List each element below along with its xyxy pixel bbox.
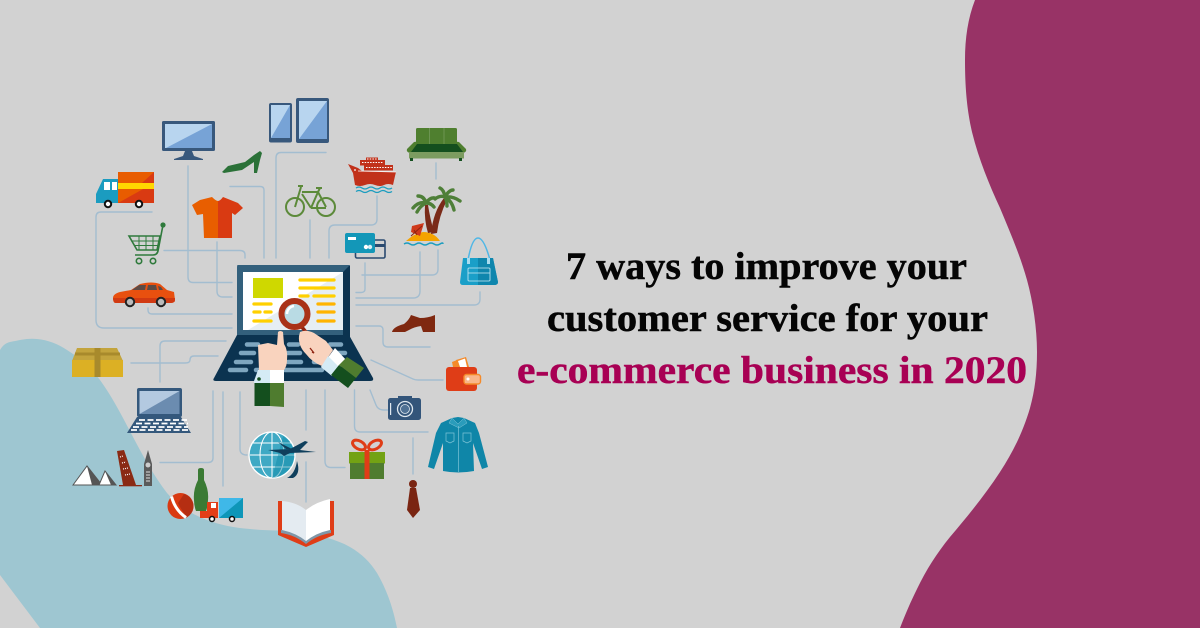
icon: cruise ship: [348, 158, 396, 192]
icon: red car: [113, 282, 175, 306]
icon: cardboard box: [72, 348, 123, 377]
central laptop with magnifier and hands: [213, 265, 373, 407]
blob: light blue left: [0, 339, 397, 628]
icon: blue shirt: [428, 417, 488, 472]
blob: purple right: [900, 0, 1200, 628]
left hand pointing: [254, 331, 287, 407]
icon: toys: [168, 468, 243, 522]
laptop keyboard base: [213, 335, 373, 381]
title: [517, 245, 1027, 392]
icon: gift box: [349, 438, 385, 479]
title line 2: customer service for your: [547, 297, 988, 340]
laptop screen: [237, 265, 350, 337]
icon: high heel shoe: [222, 151, 262, 173]
title line 1: 7 ways to improve your: [566, 245, 967, 288]
screen content: [253, 278, 334, 321]
icon: necktie: [407, 480, 420, 518]
icon: credit cards: [345, 233, 385, 258]
icon: orange t-shirt: [192, 197, 243, 238]
icon: shopping cart: [129, 223, 165, 264]
connector lines: [96, 152, 480, 502]
icon: blue handbag: [460, 238, 498, 285]
icon: delivery truck: [96, 172, 154, 207]
icon: bicycle: [286, 186, 335, 216]
icon: desktop monitor: [162, 121, 215, 160]
right hand holding magnifier: [299, 331, 364, 388]
title line 3: e-commerce business in 2020: [517, 349, 1027, 392]
icon: small laptop: [127, 388, 191, 433]
magnifier: [282, 301, 310, 337]
icon: camera: [388, 396, 421, 420]
icon: tablets: [269, 98, 329, 143]
icon: wallet: [446, 357, 480, 391]
icon: globe with plane: [249, 432, 316, 478]
icon: brown dress shoe: [392, 315, 435, 332]
icon: landmarks: [73, 450, 152, 486]
icon: open book: [278, 499, 334, 547]
icon: palm island: [404, 188, 460, 245]
icon: sofa: [407, 128, 466, 161]
